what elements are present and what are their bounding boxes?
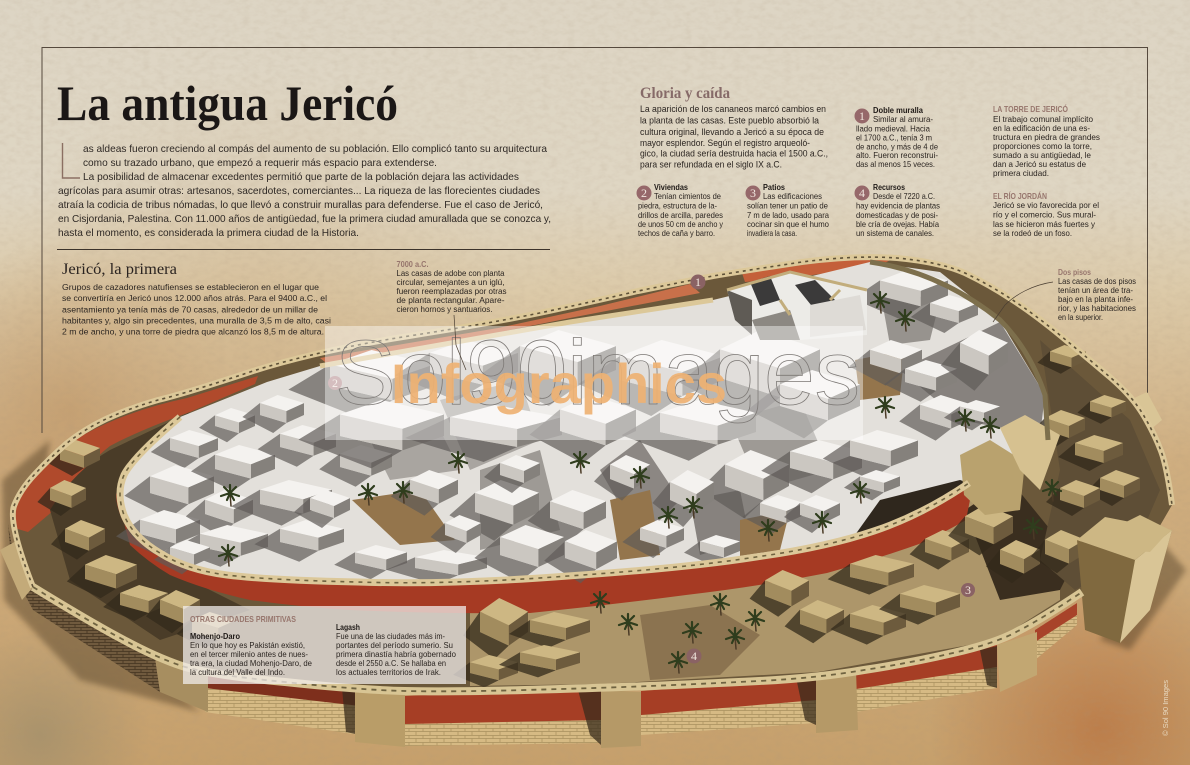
Lagash [336, 622, 456, 677]
callout: Dos pisos: rior, y las habitaciones [1058, 303, 1137, 313]
front courtyard ground [470, 490, 1060, 686]
watermark band: Sol90images [335, 322, 860, 424]
ground shadow of the wall [2, 440, 1186, 712]
Lagash: los actuales territorios de Irak. [336, 667, 441, 677]
note 1: Doble muralla [854, 105, 938, 169]
note: La torre de Jericó: dan a Jericó su estatus de [993, 159, 1086, 169]
Lagash: Fue una de las ciudades más im- [336, 631, 445, 641]
note 4: Recursos [854, 182, 941, 238]
callout: Dos pisos: Las casas de dos pisos [1058, 276, 1137, 286]
marker 3 on map [961, 583, 975, 597]
intro text: hasta el momento, es considerada la primera ciudad de la Historia. [58, 228, 359, 239]
note 1: Doble muralla: das al menos 15 veces. [856, 159, 935, 169]
marker 4 on map: 4 [691, 649, 697, 663]
divider [57, 248, 550, 250]
note 3: Patios: Patios [763, 182, 785, 192]
body: cultura original, llevando a Jericó a su época de [640, 127, 824, 137]
note 2: Viviendas: 2 [641, 186, 647, 200]
body: 2 m de ancho, y una torre de piedra que alcanzó los 8,5 m de altura. [62, 326, 324, 336]
body: gico, la ciudad sería destruida hacia el 1500 a.C., [640, 148, 828, 158]
callout: 7000 a.C.: cieron hornos y santuarios. [396, 304, 492, 314]
city ground inside outer wall [13, 257, 1172, 691]
wall battlements [13, 257, 1172, 691]
note 3: Patios: invadiera la casa. [747, 228, 797, 238]
white houses [116, 270, 1008, 584]
note 4: Recursos: un sistema de canales. [856, 228, 934, 238]
note 2: Viviendas: drillos de arcilla, paredes [638, 210, 724, 220]
note: La torre de Jericó: tructura en piedra de grandes [993, 132, 1101, 142]
outer wall red inner face, left and back [14, 258, 890, 532]
Mohenjo-Daro: en el tercer milenio antes de nues- [190, 649, 308, 659]
note 3: Patios: solían tener un patio de [747, 200, 828, 210]
note 1: Doble muralla: de ancho, y más de 4 de [856, 142, 938, 152]
dark shadow behind houses, right front [965, 480, 1075, 600]
note: La torre de Jericó: primera ciudad. [993, 168, 1049, 178]
callout: 7000 a.C.: circular, semejantes a un iglú, [396, 277, 504, 287]
Mohenjo-Daro: la cultura del Valle del Indo. [190, 667, 285, 677]
Mohenjo-Daro: tra era, la ciudad Mohenjo-Daro, de [190, 658, 312, 668]
Mohenjo-Daro: Mohenjo-Daro [190, 631, 240, 641]
panel heading: OTRAS CIUDADES PRIMITIVAS [190, 614, 296, 624]
intro text: en Cisjordania, Palestina. Con 11.000 años de antigüedad, fue la primera ciudad amurallada que se conozca y, [58, 214, 551, 225]
note 1: Doble muralla: alto. Fueron reconstrui- [856, 150, 938, 160]
Mohenjo-Daro: En lo que hoy es Pakistán existió, [190, 640, 305, 650]
illustration: walled city of Jericho [0, 257, 1186, 748]
inner wall front face [116, 483, 972, 613]
note: La torre de Jericó: LA TORRE DE JERICÓ [993, 103, 1068, 114]
dark shadowed lane left [50, 412, 250, 640]
callout: 7000 a.C.: Las casas de adobe con planta [396, 268, 505, 278]
note 4: Recursos: hay evidencia de plantas [856, 200, 941, 210]
callout: Dos pisos: Dos pisos [1058, 267, 1091, 277]
body: habitantes y, algo sin precedentes, una muralla de 3,5 m de alto, casi [62, 316, 331, 326]
leader line: Dos pisos [993, 282, 1053, 322]
note 1: Doble muralla: el 1700 a.C., tenía 3 m [856, 132, 932, 142]
marker 1 on map: 1 [695, 275, 701, 289]
watermark band: Infographics [391, 352, 727, 415]
intro text: atraía la codicia de tribus nómadas, lo que llevó a construir murallas para defenderse. Fue el caso de Jericó, [58, 200, 543, 211]
note 4: Recursos: ble cría de ovejas. Había [856, 219, 939, 229]
body: Grupos de cazadores natufienses se establecieron en el lugar que [62, 282, 319, 292]
note 3: Patios: 3 [750, 186, 756, 200]
body: la planta de las casas. Este pueblo absorbió la [640, 116, 819, 126]
upper fortress [727, 272, 867, 340]
marker 4 on map [686, 648, 702, 664]
note 4: Recursos: Recursos [873, 182, 905, 192]
note 3: Patios: 7 m de lado, usado para [747, 210, 829, 220]
palm trees [219, 292, 1061, 673]
central garden [640, 605, 760, 680]
note 2: Viviendas: Viviendas [654, 182, 688, 192]
intro text [58, 144, 551, 239]
marker 2 on map: 2 [332, 376, 338, 390]
note: El río Jordán [993, 190, 1099, 238]
shaded streets [370, 290, 1045, 555]
note: La torre de Jericó [993, 103, 1101, 178]
heading: Gloria y caída [640, 85, 730, 102]
Lagash: portantes del período sumerio. Su [336, 640, 453, 650]
note: El río Jordán: las se hicieron más fuertes y [993, 219, 1096, 229]
callout: 7000 a.C.: fueron reemplazadas por otras [396, 286, 507, 296]
leader line: 7000 a.C. [454, 315, 466, 370]
note 1: Doble muralla: 1 [859, 109, 865, 123]
note: La torre de Jericó: sumado a su antigüedad, le [993, 150, 1091, 160]
note 3: Patios: cocinar sin que el humo [747, 219, 829, 229]
Lagash: primera dinastía habría gobernado [336, 649, 456, 659]
note 1: Doble muralla: Doble muralla [873, 105, 923, 115]
note 2: Viviendas [636, 182, 724, 238]
Mohenjo-Daro [190, 631, 312, 677]
note 4: Recursos: Desde el 7220 a.C. [873, 191, 935, 201]
intro text: agrícolas para asumir otras: artesanos, sacerdotes, comerciantes... La riqueza de las florecientes ciudades [58, 186, 540, 197]
intro text: as aldeas fueron creciendo al compás del aumento de su población. Ello complicó tanto su arquitectura [83, 144, 547, 155]
page frame [42, 48, 1148, 433]
title: La antigua Jericó [57, 75, 398, 131]
towers [0, 392, 1172, 748]
note: El río Jordán: EL RÍO JORDÁN [993, 190, 1047, 201]
note 2: Viviendas: de unos 50 cm de ancho y [638, 219, 724, 229]
callout: 7000 a.C. [396, 259, 507, 314]
note 1: Doble muralla: llado medieval. Hacia [856, 124, 930, 134]
callout: 7000 a.C.: de planta rectangular. Apare- [396, 295, 505, 305]
note: La torre de Jericó: El trabajo comunal implícito [993, 114, 1093, 124]
inner city floor [120, 262, 1048, 583]
section: Gloria y caída [640, 85, 828, 170]
body [640, 104, 828, 170]
note: La torre de Jericó: en la edificación de una es- [993, 123, 1090, 133]
section: Jericó, la primera [62, 261, 331, 336]
note 3: Patios [746, 182, 829, 238]
body: se convertiría en Jericó unos 12.000 años atrás. Para el 9400 a.C., el [62, 293, 327, 303]
note 2: Viviendas: Tenían cimientos de [654, 191, 721, 201]
intro text: como su trazado urbano, que empezó a requerir más espacio para extenderse. [83, 158, 437, 169]
body [62, 282, 331, 336]
note 4: Recursos: 4 [859, 186, 865, 200]
body: mayor esplendor. Según el registro arqueoló- [640, 138, 810, 148]
Lagash: desde el 2550 a.C. Se hallaba en [336, 658, 446, 668]
panel: otras ciudades primitivas [183, 606, 466, 684]
note: El río Jordán: río y el comercio. Sus mural- [993, 210, 1096, 220]
outer wall front face [8, 523, 1077, 746]
Lagash: Lagash [336, 622, 360, 632]
marker 2 on map [328, 376, 342, 390]
note: El río Jordán: Jericó se vio favorecida por el [993, 200, 1099, 210]
callout: 7000 a.C.: 7000 a.C. [396, 259, 428, 269]
note: El río Jordán: se la rodeó de un foso. [993, 228, 1072, 238]
note 2: Viviendas: techos de caña y barro. [638, 228, 715, 238]
callout: Dos pisos: tenían un área de tra- [1058, 285, 1133, 295]
dirt courtyards [352, 350, 905, 560]
note 3: Patios: Las edificaciones [763, 191, 823, 201]
marker 3 on map: 3 [965, 583, 971, 597]
callout: Dos pisos: bajo en la planta infe- [1058, 294, 1133, 304]
marker 1 on map [690, 274, 706, 290]
callout: Dos pisos [1058, 267, 1137, 322]
intro text: La posibilidad de almacenar excedentes permitió que parte de la población dejara las actividades [83, 172, 519, 183]
body: La aparición de los cananeos marcó cambios en [640, 104, 826, 114]
drop cap L [62, 143, 80, 178]
note 4: Recursos: domesticadas y de posi- [856, 210, 938, 220]
body: para ser refundada en el siglo IX a.C. [640, 160, 782, 170]
note 1: Doble muralla: Similar al amura- [873, 114, 933, 124]
tan houses in the ring [37, 345, 1140, 687]
note: La torre de Jericó: proporciones como la torre, [993, 141, 1092, 151]
note 2: Viviendas: piedra, estructura de la- [638, 200, 717, 210]
image credit: © Sol 90 Images [1161, 680, 1170, 736]
body: asentamiento ya tenía más de 70 casas, alrededor de un millar de [62, 304, 318, 314]
callout: Dos pisos: en la superior. [1058, 312, 1103, 322]
heading: Jericó, la primera [62, 261, 177, 278]
